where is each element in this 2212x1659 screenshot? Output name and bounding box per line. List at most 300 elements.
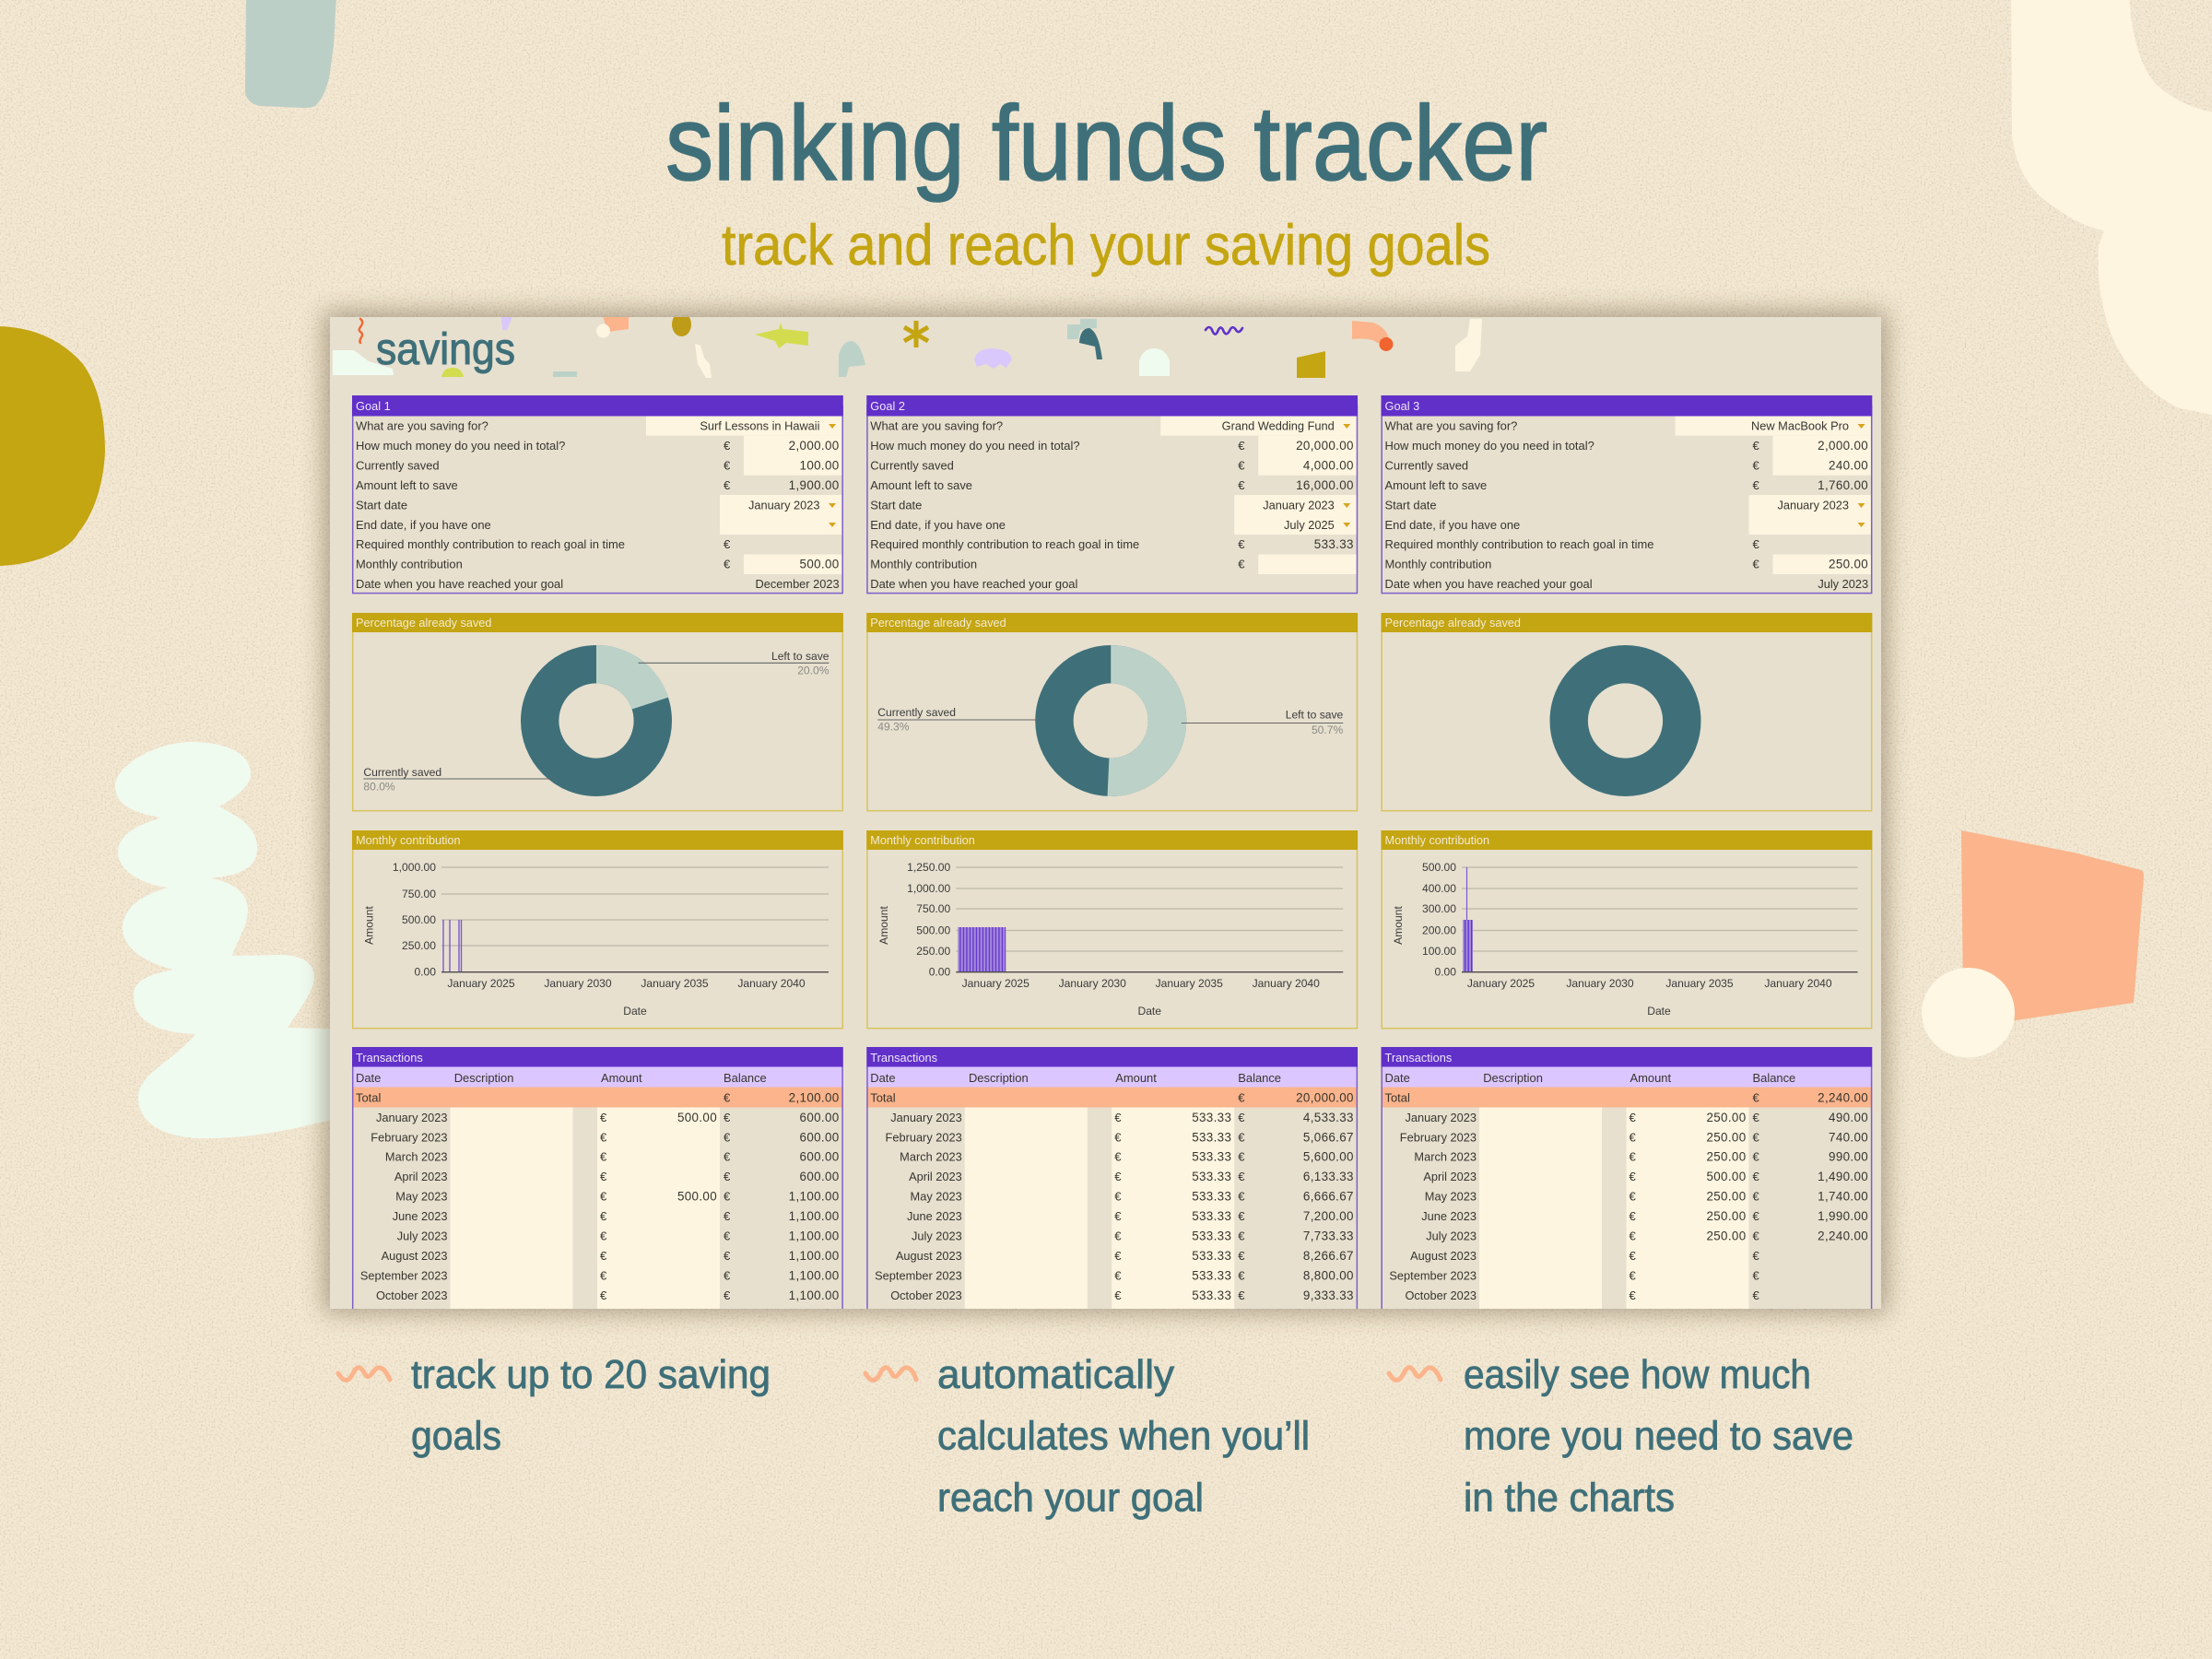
panel: goal 2 details: 4,000.00: [1303, 458, 1354, 472]
decorative shape: teal block top left: [245, 0, 336, 108]
panel: goal 3 percentage donut: [1381, 613, 1872, 811]
panel: goal 3 details: €: [1753, 439, 1760, 453]
panel: goal 2 details: Monthly contribution: [870, 558, 977, 571]
panel: goal 2 transactions: 5,600.00: [1303, 1150, 1354, 1164]
panel: goal 1 monthly contribution chart: Amount: [363, 906, 376, 945]
panel: goal 2 transactions: 533.33: [1192, 1209, 1231, 1223]
panel: goal 3 details: Monthly contribution: [1384, 558, 1491, 571]
panel: goal 2 details: Date when you have reached your goal: [870, 577, 1077, 591]
panel: goal 3 monthly contribution chart: 0.00: [1434, 966, 1456, 979]
panel: goal 2 monthly contribution chart: 1,250.00: [907, 861, 951, 874]
panel: goal 2 transactions: €: [1114, 1130, 1122, 1144]
title: sinking funds tracker: [665, 85, 1547, 203]
panel: goal 2 monthly contribution chart: Date: [1137, 1005, 1161, 1018]
panel: goal 1 transactions: 600.00: [800, 1130, 840, 1144]
panel: goal 2 details: Start date: [870, 498, 922, 512]
panel: goal 3 transactions: 740.00: [1829, 1130, 1868, 1144]
panel: goal 1 transactions: Description: [454, 1071, 513, 1085]
panel: goal 1 transactions: 1,100.00: [789, 1288, 840, 1302]
panel: goal 3 details: Date when you have reached your goal: [1384, 577, 1593, 591]
panel: goal 3 transactions: €: [1630, 1288, 1637, 1302]
panel: goal 2 transactions: 7,733.33: [1303, 1230, 1354, 1242]
panel: goal 2 transactions: 9,333.33: [1303, 1288, 1354, 1302]
panel: goal 1 percentage donut: 20.0%: [797, 664, 830, 677]
panel: goal 2 transactions: 5,066.67: [1303, 1130, 1354, 1144]
panel: goal 3 details: July 2023: [1818, 577, 1868, 591]
panel: goal 2 transactions: €: [1114, 1288, 1122, 1302]
panel: goal 2 transactions: €: [1238, 1268, 1245, 1282]
panel: goal 2 percentage donut: 50.7%: [1312, 724, 1343, 736]
panel: goal 3 monthly contribution chart: Amount: [1392, 906, 1405, 945]
decorative shape: mint blob left: [115, 742, 369, 1138]
panel: goal 1 details: 100.00: [800, 458, 840, 472]
panel: goal 2 transactions: €: [1114, 1268, 1122, 1282]
panel: goal 3 transactions: 1,490.00: [1818, 1170, 1868, 1183]
panel: goal 1 details: Goal 1: [356, 399, 391, 413]
panel: goal 1 monthly contribution chart: 0.00: [414, 966, 436, 979]
panel: goal 2 transactions: 533.33: [1192, 1170, 1231, 1183]
panel: goal 3 transactions: Transactions: [1384, 1051, 1452, 1065]
panel: goal 1 transactions: September 2023: [360, 1268, 448, 1282]
panel: goal 3 details: New MacBook Pro: [1751, 418, 1849, 433]
panel: goal 1 monthly contribution chart: January 2040: [737, 977, 806, 990]
panel: goal 3 details: How much money do you need in total?: [1384, 439, 1594, 453]
panel: goal 1 transactions: 2,100.00: [789, 1091, 840, 1104]
panel: goal 3 transactions: [1381, 1047, 1872, 1311]
panel: goal 3 transactions: 250.00: [1706, 1111, 1746, 1124]
panel: goal 1 monthly contribution chart: 500.00: [402, 913, 436, 926]
panel: goal 2 transactions: €: [1238, 1230, 1245, 1242]
panel: goal 1 details: [352, 395, 843, 594]
panel: goal 1 transactions: €: [600, 1150, 607, 1164]
panel: goal 3 transactions: €: [1630, 1190, 1637, 1204]
panel: goal 1 details: €: [724, 558, 731, 571]
panel: goal 3 monthly contribution chart: January 2035: [1665, 977, 1734, 990]
panel: goal 1 transactions: €: [600, 1230, 607, 1242]
panel: goal 1 details: €: [724, 478, 731, 492]
sheet shadow: [324, 312, 1887, 1312]
feature bullet 1: [338, 1352, 771, 1459]
panel: goal 3 details: Currently saved: [1384, 458, 1468, 472]
feature bullet 3: easily see how much: [1464, 1352, 1811, 1397]
panel: goal 2 transactions: €: [1238, 1249, 1245, 1263]
panel: goal 2 transactions: June 2023: [907, 1209, 962, 1223]
panel: goal 1 transactions: 1,100.00: [789, 1268, 840, 1282]
panel: goal 1 transactions: Amount: [601, 1071, 642, 1085]
panel: goal 1 transactions: €: [724, 1130, 731, 1144]
panel: goal 1 transactions: 1,100.00: [789, 1209, 840, 1223]
panel: goal 1 transactions: €: [724, 1288, 731, 1302]
panel: goal 3 transactions: 250.00: [1706, 1190, 1746, 1204]
panel: goal 2 transactions: Description: [969, 1071, 1029, 1085]
panel: goal 1 percentage donut: Percentage already saved: [356, 617, 491, 629]
panel: goal 3 details: Start date: [1384, 498, 1437, 512]
panel: goal 3 monthly contribution chart: January 2030: [1566, 977, 1634, 990]
panel: goal 3 transactions: October 2023: [1405, 1288, 1477, 1302]
panel: goal 1 details: Surf Lessons in Hawaii: [700, 418, 820, 433]
panel: goal 1 transactions: 1,100.00: [789, 1190, 840, 1204]
panel: goal 1 transactions: €: [600, 1170, 607, 1183]
donut chart: [1054, 665, 1168, 777]
panel: goal 2 monthly contribution chart: Monthly contribution: [870, 834, 975, 847]
panel: goal 3 details: 1,760.00: [1818, 478, 1868, 492]
panel: goal 2 percentage donut: Left to save: [1286, 708, 1344, 721]
panel: goal 2 transactions: January 2023: [890, 1111, 962, 1124]
panel: goal 1 details: 2,000.00: [789, 439, 840, 453]
panel: goal 2 transactions: €: [1238, 1170, 1245, 1183]
panel: goal 1 transactions: €: [724, 1249, 731, 1263]
decorative shape: cream circle right: [1922, 968, 2015, 1057]
feature bullet 1: goals: [411, 1414, 501, 1459]
panel: goal 3 transactions: €: [1753, 1268, 1760, 1282]
panel: goal 1 details: What are you saving for?: [356, 418, 488, 433]
panel: goal 2 details: January 2023: [1263, 498, 1335, 512]
panel: goal 3 details: 250.00: [1829, 558, 1868, 571]
panel: goal 3 transactions: 1,740.00: [1818, 1190, 1868, 1204]
panel: goal 2 transactions: €: [1238, 1209, 1245, 1223]
panel: goal 3 monthly contribution chart: 300.00: [1422, 902, 1456, 915]
panel: goal 2 details: €: [1238, 478, 1245, 492]
panel: goal 3 transactions: 250.00: [1706, 1209, 1746, 1223]
panel: goal 1 details: Amount left to save: [356, 478, 458, 492]
feature bullet 3: [1389, 1352, 1853, 1521]
panel: goal 3 transactions: 1,990.00: [1818, 1209, 1868, 1223]
panel: goal 2 details: €: [1238, 439, 1245, 453]
panel: goal 2 transactions: 8,800.00: [1303, 1268, 1354, 1282]
panel: goal 2 details: Amount left to save: [870, 478, 972, 492]
panel: goal 2 transactions: 533.33: [1192, 1268, 1231, 1282]
panel: goal 2 transactions: €: [1238, 1150, 1245, 1164]
panel: goal 2 transactions: 7,200.00: [1303, 1209, 1354, 1223]
panel: goal 2 transactions: €: [1238, 1130, 1245, 1144]
panel: goal 2 monthly contribution chart: 250.00: [916, 945, 951, 958]
panel: goal 1 details: Monthly contribution: [356, 558, 463, 571]
panel: goal 3 details: January 2023: [1777, 498, 1849, 512]
panel: goal 3 monthly contribution chart: Date: [1647, 1005, 1671, 1018]
panel: goal 1 transactions: 600.00: [800, 1170, 840, 1183]
panel: goal 2 percentage donut: Currently saved: [877, 706, 956, 719]
sheet banner decorations: [333, 312, 1482, 378]
icon: squiggle: [338, 1368, 390, 1381]
panel: goal 3 percentage donut: Percentage already saved: [1384, 617, 1521, 629]
sheet title: savings: [376, 325, 515, 374]
panel: goal 3 transactions: 250.00: [1706, 1150, 1746, 1164]
panel: goal 1 details: December 2023: [756, 577, 840, 591]
subtitle: track and reach your saving goals: [722, 214, 1490, 277]
panel: goal 1 transactions: Total: [356, 1091, 381, 1104]
panel: goal 3 transactions: Total: [1384, 1091, 1410, 1104]
panel: goal 1 transactions: €: [724, 1190, 731, 1204]
panel: goal 3 transactions: €: [1753, 1130, 1760, 1144]
panel: goal 2 monthly contribution chart: [866, 830, 1358, 1029]
panel: goal 1 details: Required monthly contribution to reach goal in time: [356, 537, 625, 551]
panel: goal 3 transactions: Balance: [1753, 1071, 1795, 1085]
panel: goal 1 transactions: April 2023: [394, 1170, 448, 1183]
panel: goal 3 transactions: Description: [1483, 1071, 1543, 1085]
panel: goal 2 monthly contribution chart: January 2035: [1156, 977, 1223, 990]
panel: goal 2 transactions: May 2023: [911, 1190, 962, 1204]
panel: goal 1 details: €: [724, 458, 731, 472]
panel: spreadsheet: [330, 312, 1881, 1311]
panel: goal 2 transactions: 533.33: [1192, 1230, 1231, 1242]
panel: goal 1 transactions: €: [724, 1268, 731, 1282]
panel: goal 3 transactions: €: [1630, 1111, 1637, 1124]
panel: goal 1 transactions: May 2023: [395, 1190, 448, 1204]
panel: goal 2 transactions: 533.33: [1192, 1249, 1231, 1263]
panel: goal 3 transactions: €: [1630, 1170, 1637, 1183]
panel: goal 3 details: €: [1753, 537, 1760, 551]
panel: goal 1 transactions: February 2023: [371, 1130, 448, 1144]
panel: goal 3 transactions: September 2023: [1389, 1268, 1477, 1282]
column: goal 2: [866, 395, 1358, 1311]
panel: goal 2 transactions: €: [1114, 1170, 1122, 1183]
panel: goal 1 percentage donut: Currently saved: [363, 766, 441, 779]
panel: goal 2 transactions: 20,000.00: [1296, 1091, 1354, 1104]
panel: goal 1 transactions: €: [724, 1170, 731, 1183]
panel: goal 3 details: 2,000.00: [1818, 439, 1868, 453]
panel: goal 3 transactions: 250.00: [1706, 1230, 1746, 1242]
panel: goal 1 transactions: €: [600, 1209, 607, 1223]
panel: goal 2 monthly contribution chart: 750.00: [916, 902, 951, 915]
panel: goal 1 transactions: June 2023: [393, 1209, 448, 1223]
panel: goal 1 transactions: €: [724, 1150, 731, 1164]
icon: squiggle: [865, 1368, 916, 1381]
panel: goal 1 monthly contribution chart: [352, 830, 843, 1029]
panel: goal 2 transactions: 533.33: [1192, 1150, 1231, 1164]
panel: goal 2 transactions: €: [1238, 1091, 1245, 1104]
panel: goal 2 details: 20,000.00: [1296, 439, 1354, 453]
panel: goal 1 transactions: €: [724, 1209, 731, 1223]
panel: goal 2 monthly contribution chart: January 2025: [962, 977, 1030, 990]
panel: goal 2 transactions: September 2023: [875, 1268, 962, 1282]
panel: goal 2 details: Goal 2: [870, 399, 905, 413]
icon: squiggle: [1389, 1368, 1441, 1381]
panel: goal 3 transactions: €: [1630, 1249, 1637, 1263]
panel: goal 1 transactions: 1,100.00: [789, 1249, 840, 1263]
panel: goal 1 details: January 2023: [748, 498, 820, 512]
panel: goal 2 monthly contribution chart: Amount: [877, 906, 890, 945]
panel: goal 3 transactions: 990.00: [1829, 1150, 1868, 1164]
panel: goal 2 percentage donut: Percentage already saved: [870, 617, 1006, 629]
column: goal 3: [1381, 395, 1872, 1311]
feature bullet 2: calculates when you’ll: [937, 1414, 1310, 1459]
panel: goal 3 transactions: 490.00: [1829, 1111, 1868, 1124]
panel: goal 2 transactions: €: [1114, 1209, 1122, 1223]
panel: goal 1 details: €: [724, 537, 731, 551]
panel: goal 1 transactions: €: [724, 1230, 731, 1242]
panel: goal 2 details: Grand Wedding Fund: [1222, 418, 1335, 433]
panel: goal 2 transactions: 8,266.67: [1303, 1249, 1354, 1263]
panel: goal 2 transactions: 533.33: [1192, 1111, 1231, 1124]
panel: goal 1 transactions: Date: [356, 1071, 381, 1085]
panel: goal 2 transactions: Balance: [1238, 1071, 1281, 1085]
panel: goal 2 transactions: [866, 1047, 1358, 1311]
panel: goal 2 monthly contribution chart: January 2040: [1253, 977, 1320, 990]
feature bullet 2: reach your goal: [937, 1475, 1204, 1521]
panel: goal 3 details: Required monthly contribution to reach goal in time: [1384, 537, 1653, 551]
panel: goal 3 transactions: 500.00: [1706, 1170, 1746, 1183]
panel: goal 1 monthly contribution chart: 250.00: [402, 939, 436, 952]
panel: goal 2 details: July 2025: [1284, 518, 1335, 532]
panel: goal 3 transactions: 2,240.00: [1818, 1230, 1868, 1242]
panel: goal 3 transactions: 2,240.00: [1818, 1091, 1868, 1104]
panel: goal 1 transactions: 500.00: [677, 1190, 717, 1204]
panel: goal 3 details: €: [1753, 458, 1760, 472]
panel: goal 2 transactions: April 2023: [909, 1170, 962, 1183]
panel: goal 2 transactions: €: [1238, 1288, 1245, 1302]
panel: goal 1 transactions: [352, 1047, 843, 1311]
panel: goal 1 percentage donut: 80.0%: [363, 780, 395, 793]
panel: goal 2 transactions: July 2023: [912, 1230, 962, 1242]
panel: goal 2 transactions: March 2023: [900, 1150, 962, 1164]
panel: goal 1 transactions: €: [600, 1111, 607, 1124]
panel: goal 3 transactions: February 2023: [1400, 1130, 1477, 1144]
panel: goal 2 transactions: 533.33: [1192, 1288, 1231, 1302]
panel: goal 2 monthly contribution chart: January 2030: [1059, 977, 1126, 990]
panel: goal 3 details: [1381, 395, 1872, 594]
panel: goal 2 details: What are you saving for?: [870, 418, 1003, 433]
decorative shape: cream blob top right: [2011, 0, 2212, 417]
donut chart: [1569, 665, 1682, 777]
panel: goal 3 transactions: June 2023: [1421, 1209, 1477, 1223]
panel: goal 1 monthly contribution chart: January 2030: [544, 977, 612, 990]
panel: goal 1 transactions: 500.00: [677, 1111, 717, 1124]
panel: goal 2 monthly contribution chart: 500.00: [916, 924, 951, 936]
panel: goal 1 transactions: €: [724, 1091, 731, 1104]
panel: goal 1 transactions: €: [600, 1268, 607, 1282]
panel: goal 3 monthly contribution chart: 400.00: [1422, 882, 1456, 895]
panel: goal 3 transactions: January 2023: [1405, 1111, 1477, 1124]
panel: goal 2 details: [866, 395, 1358, 594]
panel: goal 1 transactions: July 2023: [397, 1230, 448, 1242]
panel: goal 2 details: €: [1238, 537, 1245, 551]
panel: goal 3 transactions: €: [1753, 1249, 1760, 1263]
feature bullet 1: track up to 20 saving: [411, 1352, 771, 1397]
panel: goal 1 monthly contribution chart: January 2025: [447, 977, 515, 990]
feature bullet 3: in the charts: [1464, 1475, 1675, 1521]
panel: goal 2 transactions: 6,666.67: [1303, 1190, 1354, 1204]
panel: goal 3 transactions: 250.00: [1706, 1130, 1746, 1144]
panel: goal 3 transactions: €: [1753, 1190, 1760, 1204]
panel: goal 1 transactions: €: [600, 1249, 607, 1263]
panel: goal 2 transactions: February 2023: [886, 1130, 962, 1144]
panel: goal 3 transactions: August 2023: [1410, 1249, 1477, 1263]
panel: goal 3 transactions: Date: [1384, 1071, 1410, 1085]
panel: goal 2 details: End date, if you have one: [870, 518, 1006, 532]
panel: goal 2 details: Currently saved: [870, 458, 954, 472]
panel: goal 2 monthly contribution chart: 0.00: [929, 966, 951, 979]
decorative shape: peach quadrilateral right: [1961, 830, 2144, 1020]
panel: goal 2 transactions: Date: [870, 1071, 896, 1085]
panel: goal 2 transactions: 533.33: [1192, 1130, 1231, 1144]
panel: goal 3 transactions: €: [1753, 1209, 1760, 1223]
panel: goal 2 transactions: €: [1114, 1150, 1122, 1164]
panel: goal 1 monthly contribution chart: Date: [623, 1005, 647, 1018]
panel: goal 1 transactions: January 2023: [376, 1111, 448, 1124]
panel: goal 2 details: How much money do you need in total?: [870, 439, 1080, 453]
panel: goal 1 monthly contribution chart: Monthly contribution: [356, 834, 461, 847]
panel: goal 2 transactions: 6,133.33: [1303, 1170, 1354, 1183]
panel: goal 1 transactions: March 2023: [385, 1150, 448, 1164]
panel: goal 3 monthly contribution chart: Monthly contribution: [1384, 834, 1489, 847]
panel: goal 1 transactions: €: [600, 1288, 607, 1302]
panel: goal 2 transactions: 4,533.33: [1303, 1111, 1354, 1124]
panel: goal 1 transactions: €: [600, 1130, 607, 1144]
decorative shape: mustard blob left: [0, 326, 105, 566]
panel: goal 3 monthly contribution chart: [1381, 830, 1872, 1029]
panel: goal 3 details: €: [1753, 558, 1760, 571]
panel: goal 3 transactions: €: [1630, 1150, 1637, 1164]
panel: goal 1 details: Currently saved: [356, 458, 440, 472]
panel: goal 3 monthly contribution chart: 200.00: [1422, 924, 1456, 936]
panel: goal 3 details: What are you saving for?: [1384, 418, 1517, 433]
panel: goal 2 percentage donut: 49.3%: [877, 721, 910, 734]
panel: goal 1 transactions: 1,100.00: [789, 1230, 840, 1242]
panel: goal 1 details: How much money do you need in total?: [356, 439, 565, 453]
panel: goal 3 monthly contribution chart: 100.00: [1422, 945, 1456, 958]
panel: goal 2 transactions: €: [1114, 1230, 1122, 1242]
panel: goal 2 transactions: August 2023: [896, 1249, 962, 1263]
panel: goal 3 transactions: €: [1630, 1268, 1637, 1282]
panel: goal 2 details: 16,000.00: [1296, 478, 1354, 492]
panel: goal 3 details: Goal 3: [1384, 399, 1419, 413]
panel: goal 3 transactions: €: [1753, 1170, 1760, 1183]
panel: goal 3 transactions: July 2023: [1426, 1230, 1477, 1242]
panel: goal 3 transactions: May 2023: [1425, 1190, 1477, 1204]
panel: goal 1 percentage donut: Left to save: [771, 650, 830, 663]
panel: goal 1 details: Start date: [356, 498, 407, 512]
panel: goal 2 transactions: Total: [870, 1091, 896, 1104]
panel: goal 2 transactions: €: [1114, 1190, 1122, 1204]
panel: goal 2 monthly contribution chart: 1,000.00: [907, 882, 951, 895]
panel: goal 1 details: Date when you have reached your goal: [356, 577, 563, 591]
panel: goal 2 percentage donut: [866, 613, 1358, 811]
panel: goal 3 transactions: €: [1753, 1150, 1760, 1164]
panel: goal 3 details: End date, if you have one: [1384, 518, 1520, 532]
panel: goal 1 transactions: August 2023: [382, 1249, 448, 1263]
panel: goal 3 transactions: €: [1630, 1209, 1637, 1223]
panel: goal 2 transactions: Amount: [1115, 1071, 1157, 1085]
panel: goal 3 details: €: [1753, 478, 1760, 492]
panel: goal 2 transactions: Transactions: [870, 1051, 937, 1065]
panel: goal 3 monthly contribution chart: January 2025: [1467, 977, 1535, 990]
panel: goal 2 details: Required monthly contribution to reach goal in time: [870, 537, 1139, 551]
feature bullet 2: automatically: [937, 1352, 1174, 1397]
panel: goal 1 details: 500.00: [800, 558, 840, 571]
panel: goal 3 transactions: April 2023: [1423, 1170, 1477, 1183]
panel: goal 2 transactions: €: [1114, 1249, 1122, 1263]
panel: goal 2 transactions: €: [1114, 1111, 1122, 1124]
panel: goal 1 transactions: October 2023: [376, 1288, 448, 1302]
panel: goal 1 transactions: €: [724, 1111, 731, 1124]
panel: goal 2 details: 533.33: [1314, 537, 1354, 551]
panel: goal 1 details: End date, if you have one: [356, 518, 491, 532]
panel: goal 1 transactions: Balance: [724, 1071, 767, 1085]
panel: goal 3 transactions: €: [1630, 1230, 1637, 1242]
column: goal 1: [352, 395, 843, 1311]
panel: goal 3 transactions: March 2023: [1414, 1150, 1477, 1164]
panel: goal 3 transactions: €: [1753, 1111, 1760, 1124]
panel: goal 2 transactions: 533.33: [1192, 1190, 1231, 1204]
panel: goal 1 monthly contribution chart: 750.00: [402, 888, 436, 900]
panel: goal 3 transactions: €: [1753, 1288, 1760, 1302]
panel: goal 3 transactions: Amount: [1630, 1071, 1671, 1085]
panel: goal 1 monthly contribution chart: 1,000.00: [393, 861, 436, 874]
feature bullet 3: more you need to save: [1464, 1414, 1853, 1459]
panel: goal 3 transactions: €: [1753, 1230, 1760, 1242]
panel: goal 3 details: Amount left to save: [1384, 478, 1487, 492]
panel: goal 2 transactions: €: [1238, 1190, 1245, 1204]
